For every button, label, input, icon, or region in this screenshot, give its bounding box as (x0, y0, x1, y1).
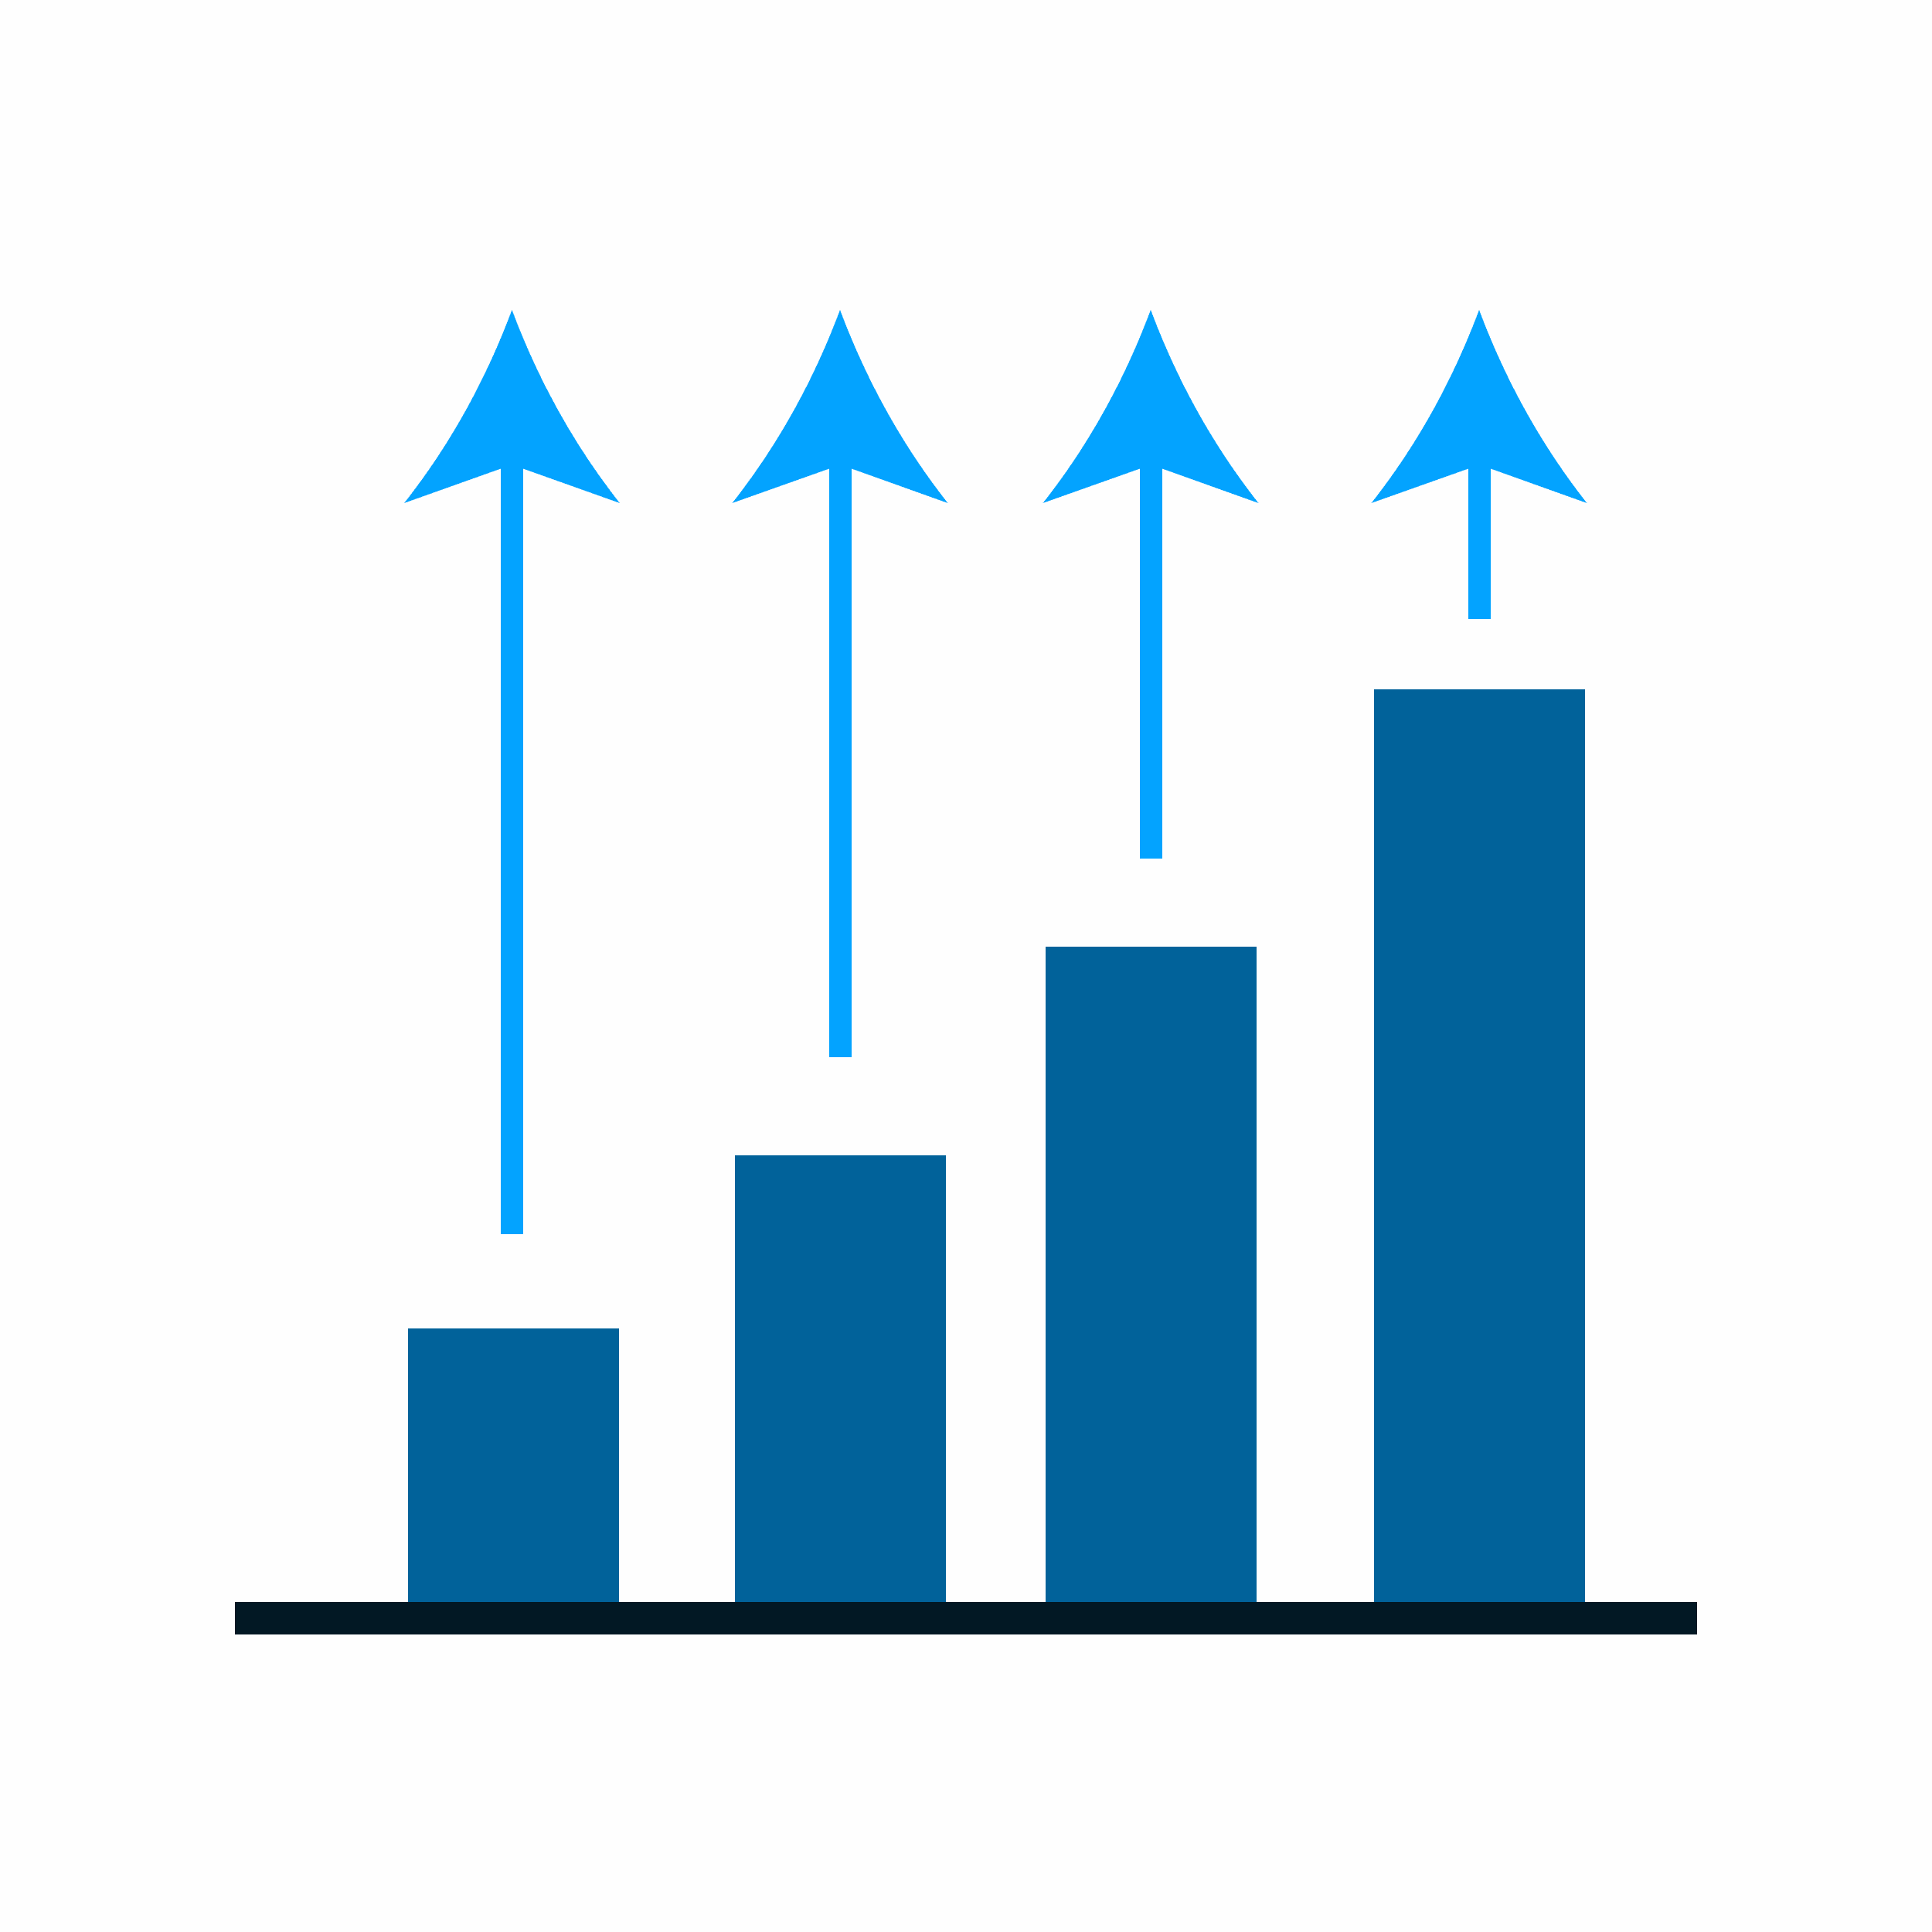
bar 2 (735, 1155, 946, 1603)
arrow 4 (1371, 310, 1587, 619)
bar 1 (408, 1328, 619, 1603)
baseline axis (235, 1602, 1697, 1634)
arrow 1 (404, 310, 620, 1234)
bar 3 (1046, 947, 1257, 1603)
bar 4 (1374, 689, 1585, 1603)
arrow 2 (733, 310, 947, 1057)
arrow 3 (1043, 310, 1258, 859)
